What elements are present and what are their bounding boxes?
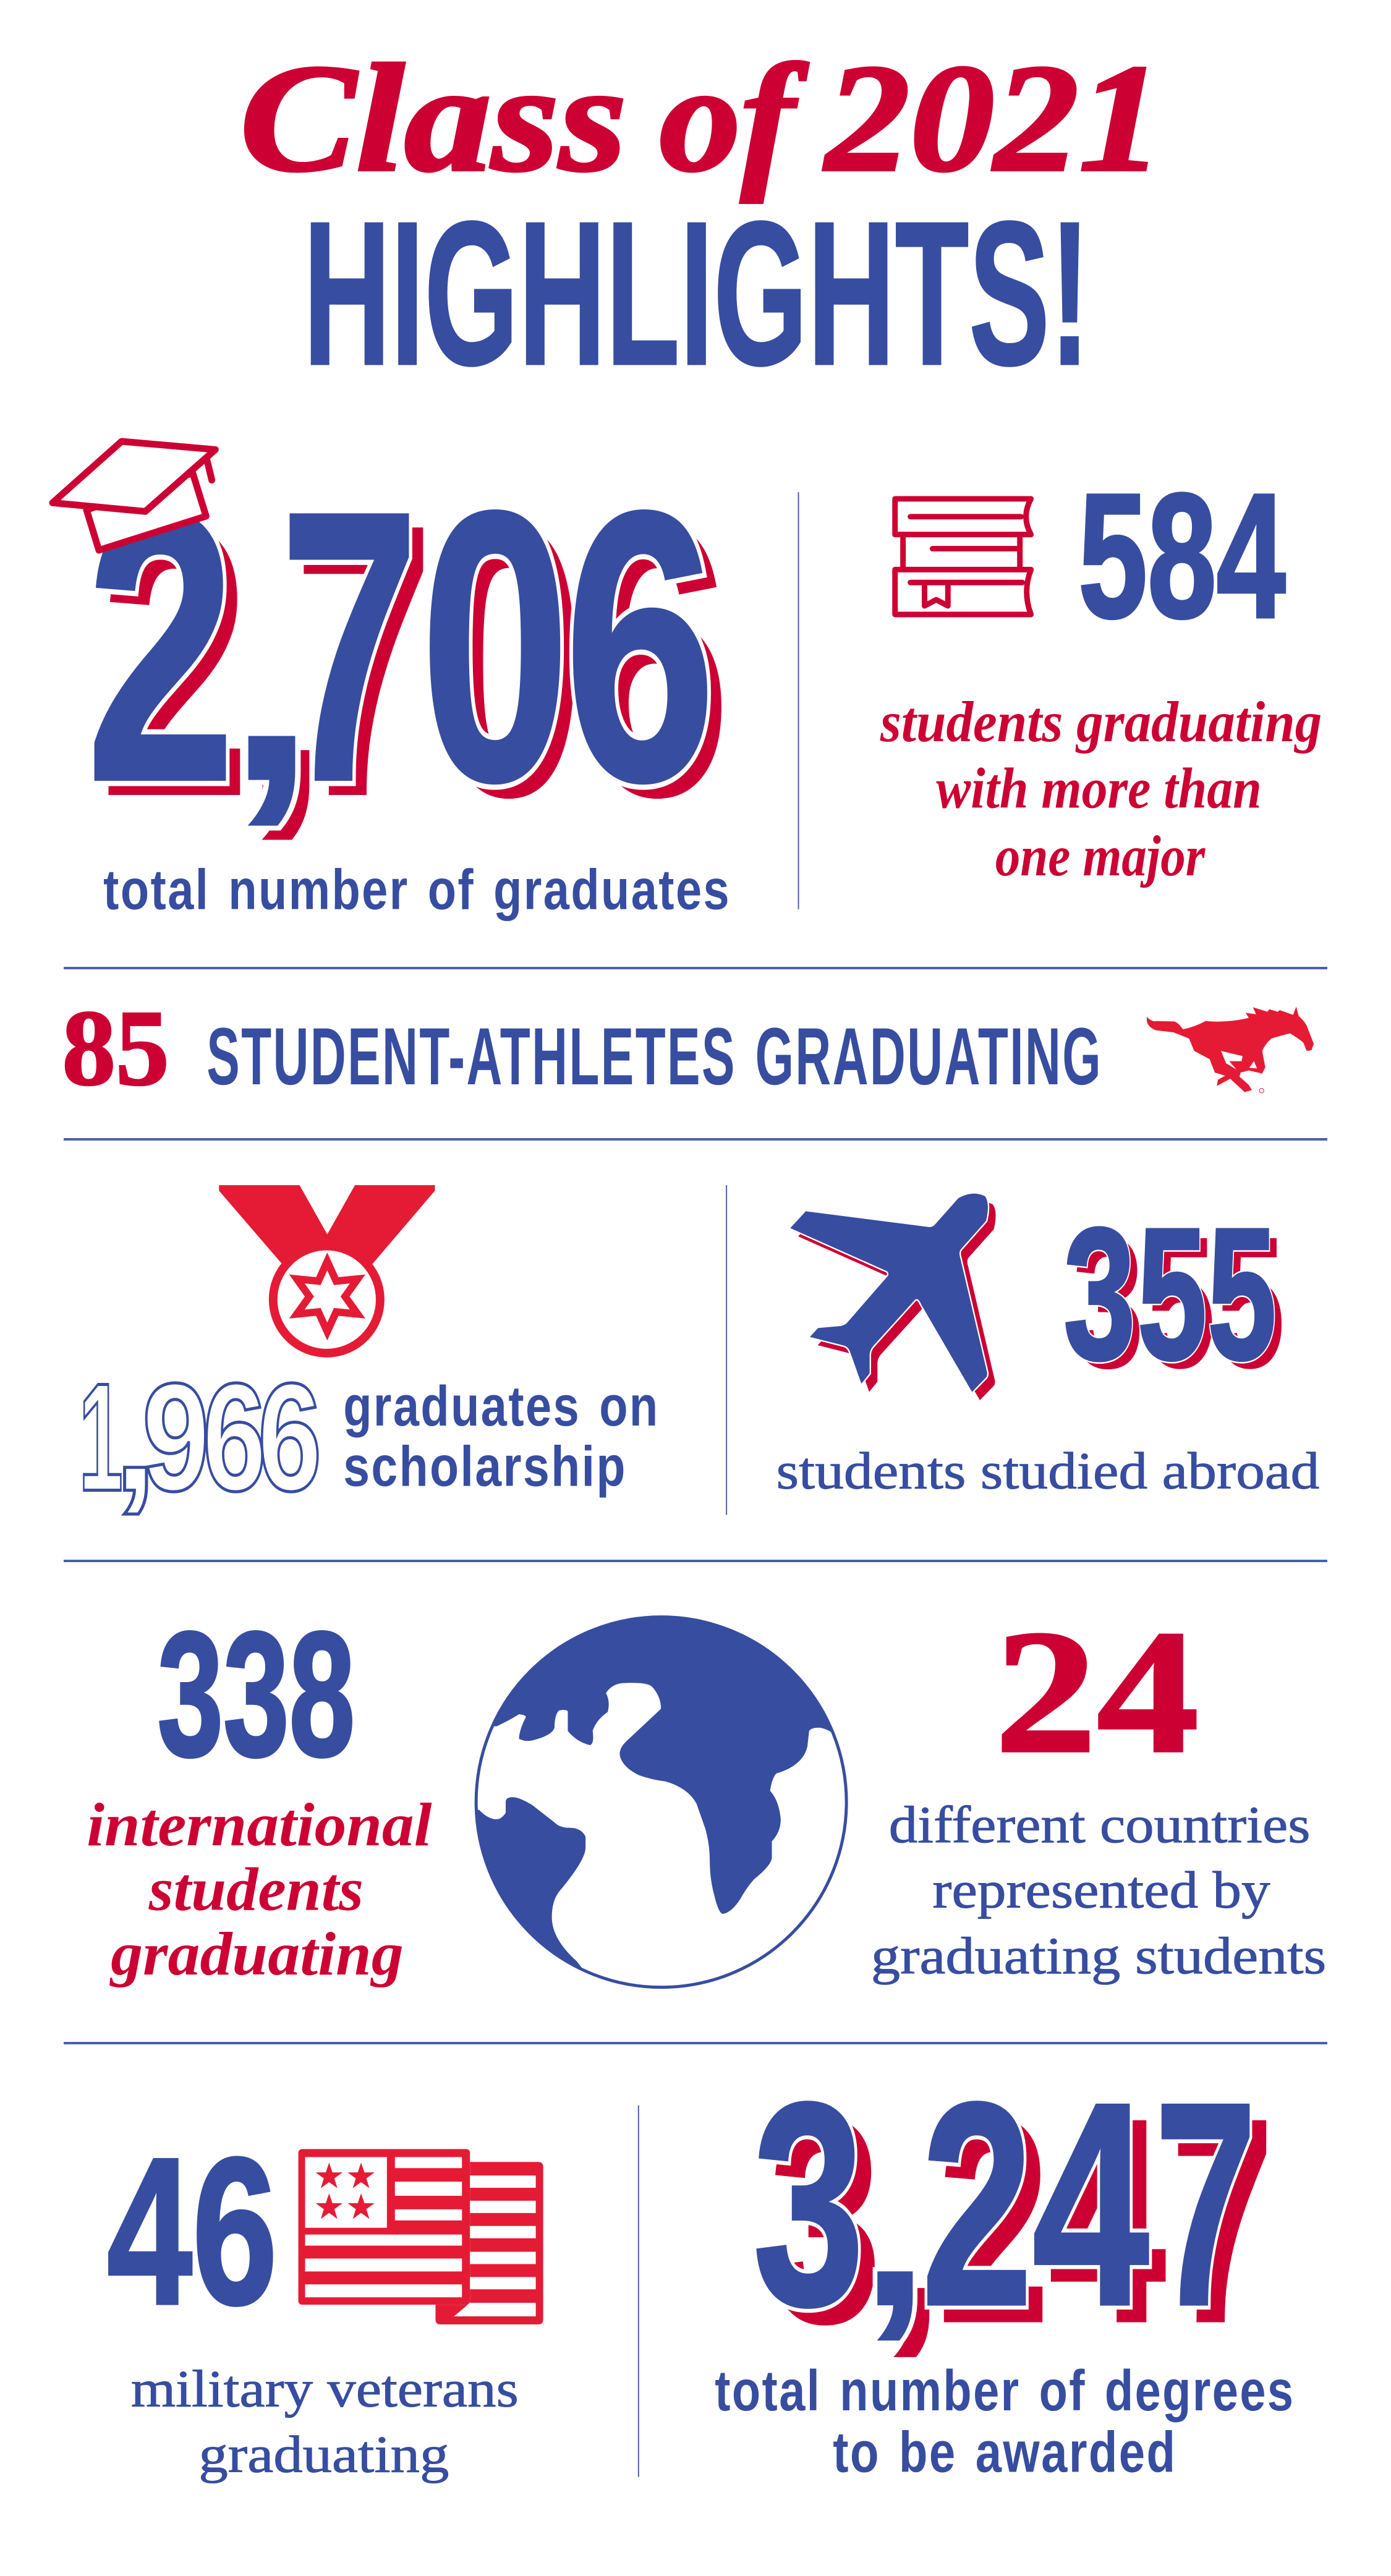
caption: different countries represented by graduating students: represented by: [932, 1861, 1270, 1919]
caption: graduates on scholarship: scholarship: [343, 1435, 627, 1498]
stat: 1,966 outlined: 9: [142, 1351, 210, 1523]
caption: students graduating with more than one major: [880, 691, 1322, 888]
title: Class of 2021: of: [660, 33, 809, 203]
caption: total number of degrees to be awarded: [715, 2358, 1295, 2485]
stat: 584: 584: [1078, 457, 1287, 655]
stat: 2,706 graduates: 7: [280, 431, 419, 861]
caption: international students graduating: [87, 1790, 432, 1988]
caption: students studied abroad: students studied abroad: [776, 1443, 1319, 1500]
caption: students graduating with more than one major: one major: [995, 825, 1206, 888]
stat: 3,247 degrees: 7: [1155, 2043, 1257, 2366]
stat: 1,966 outlined: 1: [79, 1351, 123, 1523]
stat: 3,247 degrees: 2: [922, 2043, 1033, 2366]
stat: 2,706 graduates: 0: [420, 431, 570, 861]
icon: mustang: [1147, 1006, 1314, 1093]
stat: 3,247 degrees: 3: [770, 2060, 881, 2383]
section: veterans and degrees stats: [107, 2043, 1295, 2485]
stat: 2,706 graduates: ,: [225, 514, 317, 843]
stat: 2,706 graduates: 7: [294, 446, 433, 875]
icon: flag: [299, 2149, 543, 2324]
stat: 46: 46: [107, 2114, 278, 2348]
icon: graduation cap: [53, 441, 215, 550]
caption: total number of graduates: total number of graduates: [103, 859, 731, 922]
stat: 3,247 degrees: 7: [1171, 2060, 1274, 2383]
stat: 3,247 degrees: 2: [922, 2043, 1033, 2366]
title: Class of 2021: Class: [240, 33, 627, 203]
caption: different countries represented by graduating students: graduating students: [871, 1928, 1326, 1985]
stat: 3,247 degrees: 4: [1049, 2060, 1167, 2383]
icon: medal: [219, 1185, 435, 1353]
stat: 355: 5: [1138, 1189, 1207, 1399]
title: Class of 2021: 2021: [823, 33, 1163, 203]
caption: students graduating with more than one major: students graduating: [880, 691, 1322, 754]
stat: 2,706 graduates: 2: [100, 446, 250, 875]
stat: 355: 3: [1063, 1189, 1136, 1399]
stat: 3,247 degrees: 4: [1032, 2043, 1151, 2366]
caption: international students graduating: students: [148, 1855, 364, 1923]
stat: 355: 5: [1207, 1189, 1277, 1399]
stat: 1,966 outlined: ,: [114, 1351, 157, 1523]
icon: stack of books: [895, 499, 1031, 614]
icon: airplane: [790, 1194, 996, 1400]
caption: military veterans graduating: graduating: [198, 2426, 449, 2484]
stat: 3,247 degrees: ,: [877, 2117, 946, 2371]
stat: 2,706 graduates: 0: [420, 431, 570, 861]
stat: 1,966 outlined: [79, 1351, 321, 1523]
caption: international students graduating: graduating: [109, 1919, 404, 1988]
stat: 2,706 graduates: ,: [239, 528, 331, 857]
caption: different countries represented by graduating students: different countries: [889, 1796, 1310, 1854]
stat: 355: 5: [1138, 1189, 1207, 1399]
stat: 2,706 graduates: 6: [564, 431, 716, 861]
stat: 355: 5: [1207, 1189, 1277, 1399]
stat: 2,706 graduates: ,: [225, 514, 317, 843]
caption: international students graduating: international: [87, 1790, 432, 1859]
stat: 2,706 graduates: 2: [86, 431, 236, 861]
stat: 3,247 degrees: 2: [938, 2060, 1049, 2383]
stat: 3,247 degrees: 3: [753, 2043, 864, 2366]
stat: 355: [1063, 1189, 1285, 1408]
stat: 3,247 degrees: 3: [753, 2043, 864, 2366]
caption: total number of degrees to be awarded: to be awarded: [833, 2420, 1176, 2485]
stat: 355: 5: [1216, 1198, 1285, 1408]
stat: 2,706 graduates: 6: [564, 431, 716, 861]
stat: 2,706 graduates: 2: [86, 431, 236, 861]
stat: 3,247 degrees: ,: [860, 2100, 929, 2354]
stat: 3,247 degrees: [753, 2043, 1274, 2383]
section: title and top stats: [86, 33, 1322, 922]
stat: 1,966 outlined: 6: [202, 1351, 266, 1523]
stat: 2,706 graduates: 6: [578, 446, 730, 875]
icon: globe: [475, 1615, 848, 1989]
caption: military veterans graduating: [131, 2360, 519, 2484]
stat: 2,706 graduates: [86, 431, 730, 875]
stat: 3,247 degrees: 7: [1155, 2043, 1257, 2366]
stat: 3,247 degrees: ,: [860, 2100, 929, 2354]
caption: students graduating with more than one major: with more than: [936, 757, 1262, 820]
caption: graduates on scholarship: [343, 1375, 660, 1498]
caption: military veterans graduating: military veterans: [131, 2360, 519, 2418]
stat: 3,247 degrees: 4: [1032, 2043, 1151, 2366]
section: international stats: [88, 1615, 1324, 1989]
caption: different countries represented by graduating students: [871, 1796, 1326, 1985]
stat: 24: 24: [995, 1594, 1199, 1790]
stat: 2,706 graduates: 7: [280, 431, 419, 861]
stat: 355: 3: [1072, 1198, 1144, 1408]
stat: 1,966 outlined: 6: [258, 1351, 321, 1523]
title: Class of 2021: [240, 33, 1163, 203]
caption: graduates on scholarship: graduates on: [343, 1375, 660, 1438]
section: athletes and scholarship stats: [62, 988, 1319, 1523]
stat: 355: 5: [1146, 1198, 1215, 1408]
stat: 85: 85: [62, 988, 169, 1108]
stat: 338: 338: [158, 1596, 355, 1793]
stat: 355: 3: [1063, 1189, 1136, 1399]
stat: 2,706 graduates: 0: [434, 446, 584, 875]
